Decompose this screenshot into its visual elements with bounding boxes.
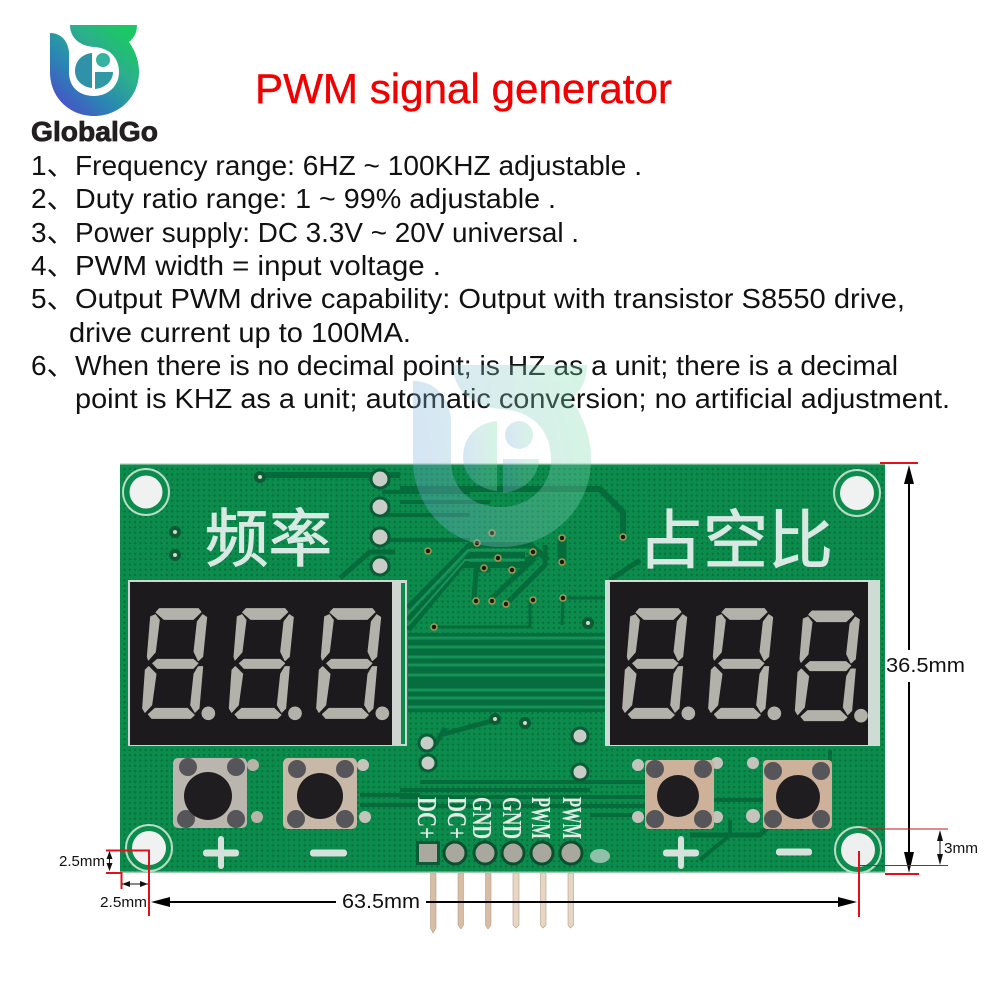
silkscreen: plus and minus marks: [203, 836, 812, 869]
logo: GlobalGo: GlobalGo: [31, 116, 158, 147]
dimension: hole offset 2.5mm: 2.5mm: [100, 895, 147, 911]
push button 2: [283, 758, 371, 829]
board substrate: [120, 463, 885, 873]
silkscreen: 占空比: 占空比: [638, 505, 833, 577]
specification list: Output PWM drive capability: Output with transistor S8550 drive,: [75, 283, 905, 314]
specification list: Frequency range: 6HZ ~ 100KHZ adjustable .: [75, 150, 642, 181]
specification list: Power supply: DC 3.3V ~ 20V universal .: [75, 217, 579, 248]
dimension: hole offset 2.5mm: 2.5mm: [59, 854, 105, 870]
pin solder pads: [416, 841, 610, 865]
dimension: height 36.5mm: [880, 463, 965, 874]
dimension: width 63.5mm: 63.5mm: [342, 891, 420, 913]
copper traces: [265, 475, 830, 860]
display: frequency: [128, 580, 407, 746]
specification list: 1、: [31, 150, 75, 181]
specification list: drive current up to 100MA.: [69, 317, 411, 348]
dimension: hole offset 2.5mm: [59, 850, 149, 916]
pin labels: PWM: [526, 797, 556, 839]
specification list: 6、: [31, 350, 75, 381]
push button 3: [632, 757, 723, 829]
dimension: hole offset 3mm: [859, 829, 978, 917]
pin labels: PWM: [557, 797, 587, 839]
dimension: width 63.5mm: [151, 891, 857, 913]
mounting holes: [123, 469, 881, 873]
pin labels: [412, 797, 587, 839]
title: PWM signal generator: [255, 65, 672, 112]
watermark logo: [413, 365, 591, 547]
circuit board: [120, 463, 885, 873]
specification list: 3、: [31, 217, 75, 248]
push button 4: [746, 757, 832, 829]
display: duty ratio: [605, 580, 880, 746]
bus trace band: [408, 633, 605, 712]
specification list: PWM width = input voltage .: [75, 250, 441, 281]
specification list: 2、: [31, 183, 75, 214]
specification list: [31, 150, 950, 414]
push button 1: [173, 758, 263, 828]
specification list: 4、: [31, 250, 75, 281]
pin labels: GND: [497, 797, 527, 839]
specification list: When there is no decimal point; is HZ as a unit; there is a decimal: [75, 350, 898, 381]
header pins: [430, 873, 574, 933]
vias: [171, 470, 626, 780]
dimension: height 36.5mm: 36.5mm: [886, 655, 965, 677]
specification list: 5、: [31, 283, 75, 314]
dimension: hole offset 3mm: 3mm: [944, 841, 978, 857]
specification list: point is KHZ as a unit; automatic conversion; no artificial adjustment.: [75, 383, 950, 414]
specification list: Duty ratio range: 1 ~ 99% adjustable .: [75, 183, 556, 214]
logo: GlobalGo: [31, 25, 158, 147]
pin labels: DC+: [442, 797, 472, 839]
silkscreen: 频率: 频率: [205, 505, 332, 575]
pin labels: GND: [467, 797, 497, 839]
pin labels: DC+: [412, 797, 442, 839]
